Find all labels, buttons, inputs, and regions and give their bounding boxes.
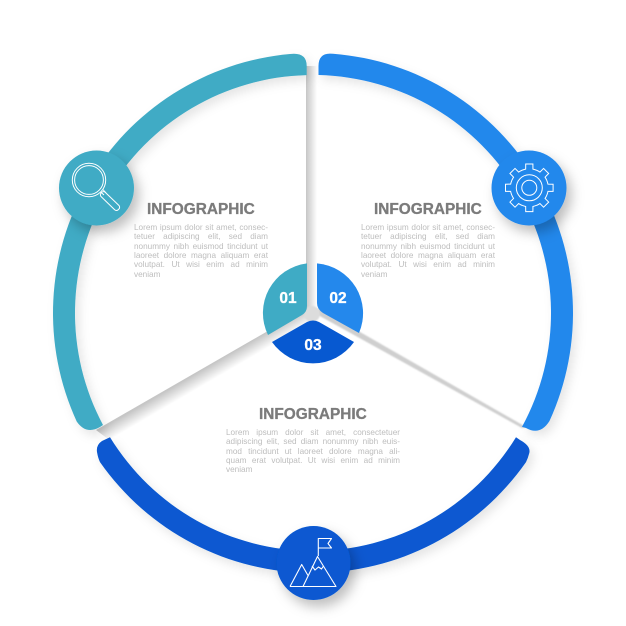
center wedge 01: 01 (279, 290, 297, 307)
text block: panel 2 (361, 223, 495, 279)
text block: panel 3: quam erat volutpat. Ut wisi enim ad minim (226, 456, 400, 465)
panel 3 arc: dark blue (97, 437, 530, 573)
text block: panel 3: Lorem ipsum dolor sit amet, consectetuer (226, 428, 400, 437)
heading: panel 1: INFOGRAPHIC (147, 201, 255, 218)
text block: panel 2: nonummy nibh euismod tincidunt ut (361, 242, 495, 251)
icon: gear (492, 150, 566, 226)
text block: panel 2: volutpat. Ut wisi enim ad minim (361, 260, 495, 269)
text block: panel 2: laoreet dolore magna aliquam erat (361, 251, 495, 260)
center wedge 03 (272, 320, 354, 363)
panel 1 arc: teal (53, 54, 307, 430)
icon: mountain with flag (276, 526, 350, 600)
text block: panel 2: Lorem ipsum dolor sit amet, consec- (361, 223, 495, 232)
text block: panel 3: mod tincidunt ut laoreet dolore magna ali- (226, 447, 400, 456)
text block: panel 1: Lorem ipsum dolor sit amet, consec- (134, 223, 268, 232)
text block: panel 1: veniam (134, 270, 160, 279)
text block: panel 2: veniam (361, 270, 387, 279)
text block: panel 1 (134, 223, 268, 279)
center wedge 02: 02 (329, 290, 347, 307)
center wedge 01 (263, 263, 307, 335)
icon: magnifying glass (59, 150, 134, 226)
heading: panel 2: INFOGRAPHIC (374, 201, 482, 218)
text block: panel 1: nonummy nibh euismod tincidunt ut (134, 242, 268, 251)
heading: panel 3: INFOGRAPHIC (259, 406, 367, 422)
text block: panel 3 (226, 428, 400, 474)
text block: panel 1: tetuer adipiscing elit, sed diam (134, 232, 268, 241)
center wedge 03: 03 (304, 337, 322, 354)
center wedge 02 (317, 263, 363, 333)
divider shadows (96, 66, 526, 442)
panel 2 arc: blue (318, 54, 573, 431)
text block: panel 2: tetuer adipiscing elit, sed diam (361, 232, 495, 241)
text block: panel 1: laoreet dolore magna aliquam erat (134, 251, 268, 260)
text block: panel 3: veniam (226, 465, 252, 474)
text block: panel 3: adipiscing elit, sed diam nonummy nibh euis- (226, 437, 400, 446)
text block: panel 1: volutpat. Ut wisi enim ad minim (134, 260, 268, 269)
